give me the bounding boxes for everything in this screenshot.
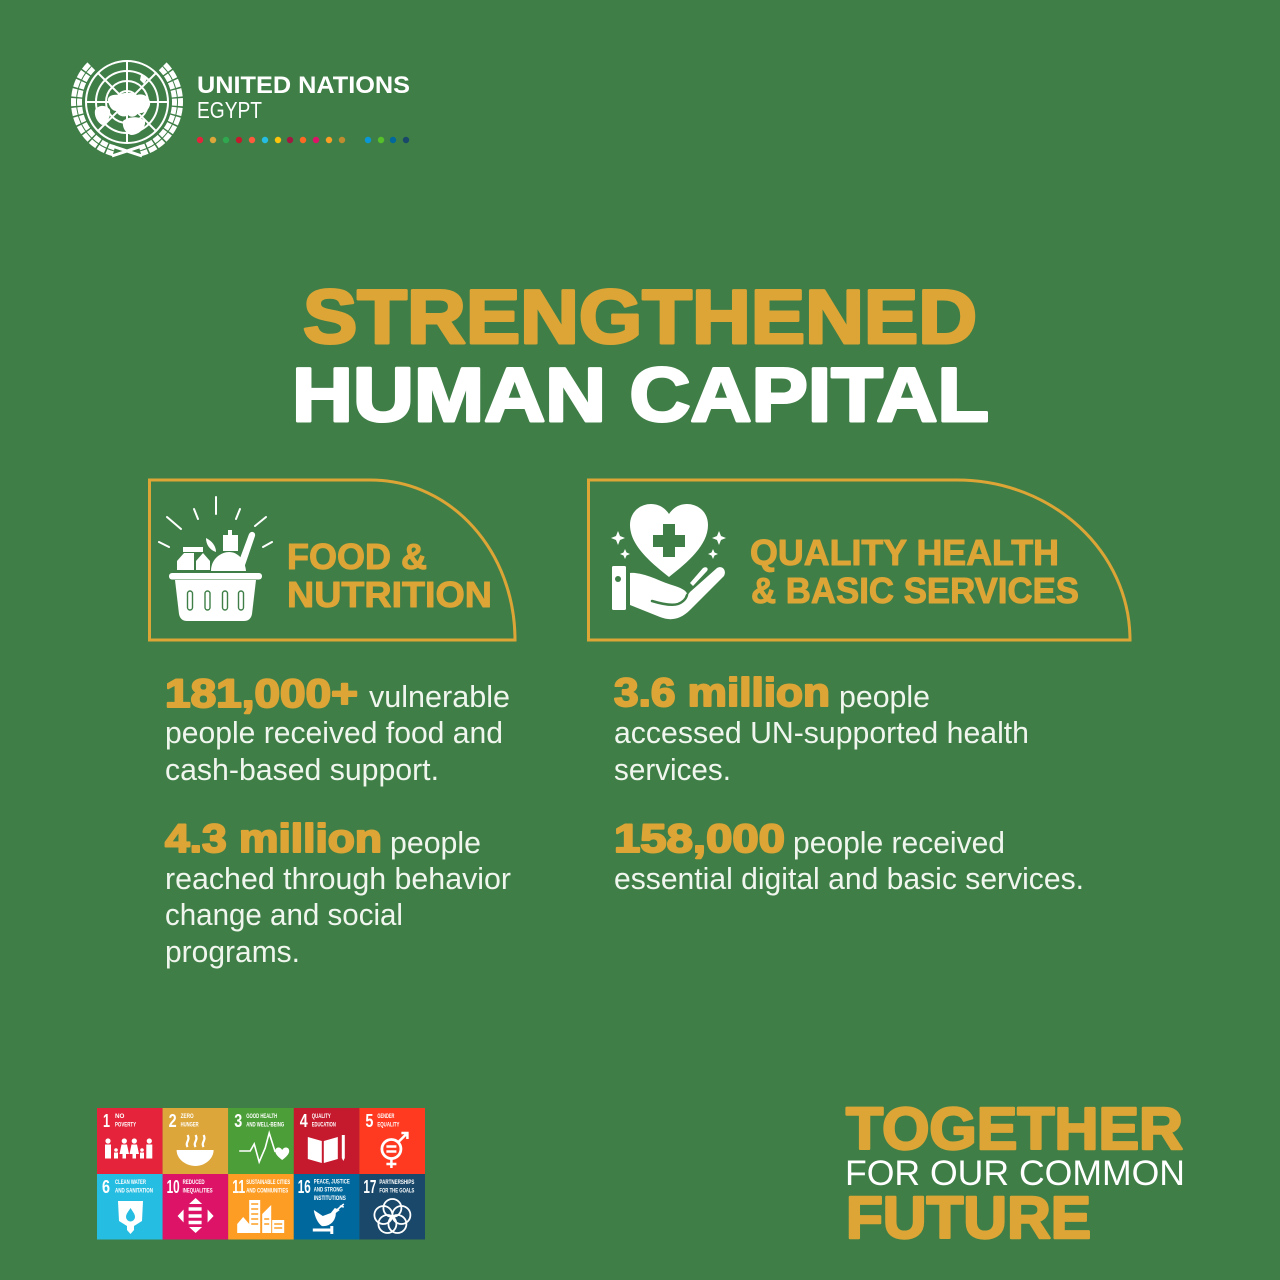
panel outline bbox=[588, 480, 1130, 640]
tile: SDG 11: 11 bbox=[232, 1177, 245, 1197]
tile: SDG 11: AND COMMUNITIES bbox=[246, 1188, 288, 1194]
tile: SDG 1 bbox=[97, 1108, 163, 1174]
slogan: Together for our common future: FOR OUR COMMON bbox=[845, 1154, 1185, 1193]
tile: SDG 17: PARTNERSHIPS bbox=[379, 1179, 414, 1186]
tile: SDG 5: EQUALITY bbox=[377, 1122, 400, 1128]
tile: SDG 6: CLEAN WATER bbox=[115, 1179, 146, 1186]
text block: 158,000 people: 158,000 bbox=[614, 817, 785, 861]
organisation name: UNITED NATIONS bbox=[197, 72, 410, 99]
tile: SDG 10: INEQUALITIES bbox=[183, 1188, 213, 1194]
tile: SDG 10: 10 bbox=[167, 1177, 180, 1197]
tile: SDG 1: NO bbox=[115, 1113, 125, 1120]
icon: hand holding heart bbox=[611, 504, 726, 619]
SDG colour dots bbox=[197, 137, 409, 143]
text block: 3.6 million people: 3.6 million bbox=[614, 671, 830, 715]
tile: SDG 5: GENDER bbox=[377, 1113, 395, 1120]
text block: 4.3 million people: change and social bbox=[165, 897, 403, 932]
tile: SDG 10 bbox=[163, 1174, 228, 1240]
tile: SDG 16: INSTITUTIONS bbox=[314, 1195, 346, 1202]
tile: SDG 17 bbox=[359, 1174, 425, 1240]
text block: 158,000 people: people received bbox=[793, 825, 1005, 860]
tile: SDG 16: 16 bbox=[298, 1177, 311, 1197]
text block: 181,000+ vulnerable people: people received food and bbox=[165, 715, 503, 750]
tile: SDG 11: SUSTAINABLE CITIES bbox=[246, 1179, 290, 1186]
text block: 181,000+ vulnerable people: vulnerable bbox=[369, 679, 510, 714]
text block: 181,000+ vulnerable people: 181,000+ bbox=[165, 672, 358, 716]
tile: SDG 2: 2 bbox=[169, 1111, 177, 1131]
tile: SDG 3: AND WELL-BEING bbox=[246, 1122, 284, 1128]
SDG icon grid bbox=[97, 1108, 425, 1240]
tile: SDG 10: REDUCED bbox=[183, 1179, 205, 1186]
text block: 3.6 million people bbox=[614, 671, 1029, 787]
tile: SDG 3: 3 bbox=[234, 1111, 242, 1131]
tile: SDG 5 bbox=[359, 1108, 425, 1174]
tile: SDG 2 bbox=[163, 1108, 228, 1174]
tile: SDG 6 bbox=[97, 1174, 163, 1240]
country name: EGYPT bbox=[197, 97, 262, 123]
panel: quality health and basic services bbox=[588, 480, 1130, 640]
tile: SDG 3: GOOD HEALTH bbox=[246, 1113, 278, 1120]
tile: SDG 6: 6 bbox=[102, 1177, 110, 1197]
title line 1: STRENGTHENED bbox=[303, 275, 977, 360]
tile: SDG 17: 17 bbox=[363, 1177, 376, 1197]
tile: SDG 4 bbox=[294, 1108, 359, 1174]
icon: food basket bbox=[159, 497, 272, 621]
slogan: Together for our common future: TOGETHER bbox=[846, 1096, 1183, 1162]
slogan: Together for our common future bbox=[845, 1096, 1185, 1251]
panel heading bbox=[750, 532, 1079, 611]
panel heading: QUALITY HEALTH bbox=[750, 532, 1059, 573]
tile: SDG 16 bbox=[294, 1174, 359, 1240]
text block: 158,000 people bbox=[614, 817, 1084, 896]
tile: SDG 11 bbox=[228, 1174, 294, 1240]
tile: SDG 17: FOR THE GOALS bbox=[379, 1188, 414, 1194]
slogan: Together for our common future: FUTURE bbox=[846, 1185, 1091, 1251]
tile: SDG 2: ZERO bbox=[181, 1113, 194, 1120]
text block: 3.6 million people: accessed UN-supported health bbox=[614, 715, 1029, 750]
text block: 158,000 people: essential digital and basic services. bbox=[614, 861, 1084, 896]
panel heading bbox=[287, 536, 492, 615]
tile: SDG 3 bbox=[228, 1108, 294, 1174]
title bbox=[292, 275, 989, 438]
tile: SDG 1: POVERTY bbox=[115, 1122, 137, 1128]
text block: 3.6 million people: people bbox=[839, 679, 930, 714]
text block: 3.6 million people: services. bbox=[614, 752, 731, 787]
text block: 4.3 million people bbox=[165, 817, 511, 969]
panel heading: FOOD & bbox=[287, 536, 427, 577]
panel outline bbox=[150, 480, 515, 640]
tile: SDG 4: 4 bbox=[300, 1111, 308, 1131]
tile: SDG 4: QUALITY bbox=[312, 1113, 331, 1120]
text block: 4.3 million people: people bbox=[390, 825, 481, 860]
text block: 4.3 million people: programs. bbox=[165, 934, 300, 969]
logo: United Nations Egypt bbox=[76, 61, 410, 156]
tile: SDG 6: AND SANITATION bbox=[115, 1188, 153, 1194]
panel heading: & BASIC SERVICES bbox=[751, 570, 1079, 611]
tile: SDG 1: 1 bbox=[103, 1111, 110, 1131]
text block: 4.3 million people: 4.3 million bbox=[165, 817, 382, 861]
tile: SDG 16: AND STRONG bbox=[314, 1186, 343, 1194]
tile: SDG 16: PEACE, JUSTICE bbox=[314, 1178, 350, 1186]
panel heading: NUTRITION bbox=[287, 574, 492, 615]
text block: 181,000+ vulnerable people bbox=[165, 672, 510, 787]
text block: 4.3 million people: reached through behavior bbox=[165, 861, 511, 896]
panel: food and nutrition bbox=[150, 480, 515, 640]
tile: SDG 2: HUNGER bbox=[181, 1122, 199, 1128]
text block: 181,000+ vulnerable people: cash-based support. bbox=[165, 752, 439, 787]
tile: SDG 4: EDUCATION bbox=[312, 1122, 336, 1128]
title line 2: HUMAN CAPITAL bbox=[292, 353, 989, 438]
icon: UN emblem bbox=[76, 61, 178, 156]
tile: SDG 5: 5 bbox=[365, 1111, 373, 1131]
